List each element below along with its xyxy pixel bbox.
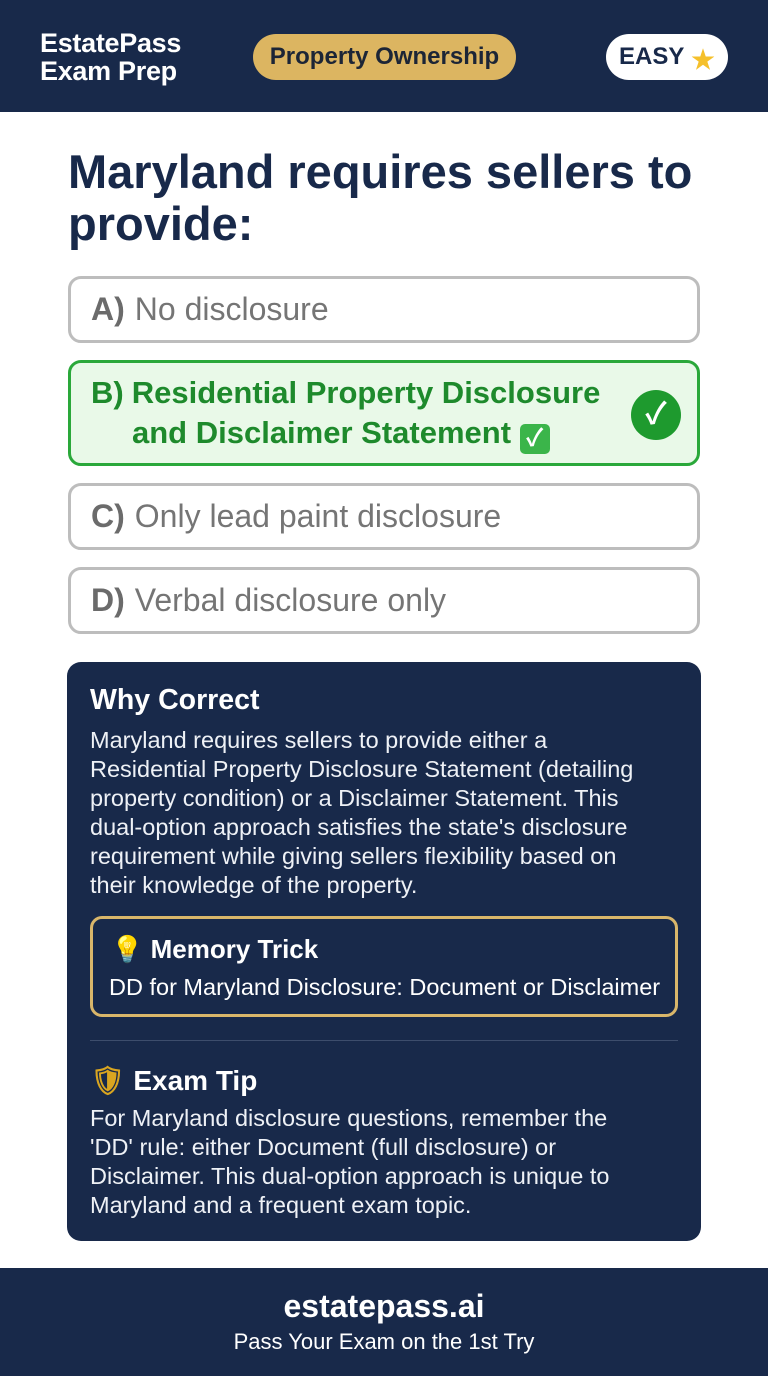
exam tip text: Disclaimer. This dual-option approach is unique to bbox=[90, 1163, 609, 1189]
why correct text: Maryland requires sellers to provide either a Residential Property Disclosure Statement (detailing property condition) or a Disclaimer Statement. This dual-option approach satisfies the state's disclosure requirement while giving sellers flexibility based on their knowledge of the property. bbox=[90, 727, 633, 898]
question title: Maryland requires sellers to provide: bbox=[68, 145, 692, 250]
exam tip text: 'DD' rule: either Document (full disclosure) or bbox=[90, 1134, 556, 1160]
option C bbox=[68, 483, 700, 550]
option D: D) bbox=[91, 582, 125, 618]
option B correct: and Disclaimer Statement bbox=[132, 414, 511, 450]
footer tagline: Pass Your Exam on the 1st Try bbox=[234, 1329, 534, 1354]
option B correct: B) Residential Property Disclosure bbox=[91, 374, 600, 410]
option A: A) bbox=[91, 291, 125, 327]
memory trick box: DD for Maryland Disclosure: Document or Disclaimer bbox=[109, 974, 660, 1000]
option C: C) bbox=[91, 498, 125, 534]
logo text: EstatePass bbox=[40, 28, 181, 58]
logo text: Exam Prep bbox=[40, 56, 177, 86]
footer bbox=[0, 1268, 768, 1376]
memory trick box bbox=[90, 916, 678, 1017]
option A: No disclosure bbox=[135, 291, 329, 327]
why correct heading: Why Correct bbox=[90, 684, 259, 716]
icon: check circle bbox=[631, 390, 681, 440]
option C: Only lead paint disclosure bbox=[135, 498, 501, 534]
option B correct bbox=[68, 360, 700, 466]
memory trick box: 💡 Memory Trick bbox=[111, 934, 318, 964]
difficulty pill bbox=[606, 34, 728, 80]
exam tip text bbox=[90, 1105, 609, 1218]
exam tip heading: 🛡 Exam Tip bbox=[90, 1065, 257, 1096]
difficulty pill: EASY bbox=[619, 43, 684, 70]
header bbox=[0, 0, 768, 112]
icon: check circle: ✓ bbox=[645, 398, 667, 431]
logo text bbox=[40, 28, 181, 86]
option B correct: ✓ bbox=[526, 424, 543, 452]
exam tip text: For Maryland disclosure questions, remember the bbox=[90, 1105, 607, 1131]
exam tip text: Maryland and a frequent exam topic. bbox=[90, 1192, 471, 1218]
option A bbox=[68, 276, 700, 343]
category pill: Property Ownership bbox=[270, 43, 499, 70]
explanation panel bbox=[67, 662, 701, 1241]
category pill bbox=[253, 34, 516, 80]
footer brand: estatepass.ai bbox=[283, 1288, 484, 1324]
option D bbox=[68, 567, 700, 634]
difficulty pill: ★ bbox=[691, 46, 715, 74]
option D: Verbal disclosure only bbox=[135, 582, 446, 618]
